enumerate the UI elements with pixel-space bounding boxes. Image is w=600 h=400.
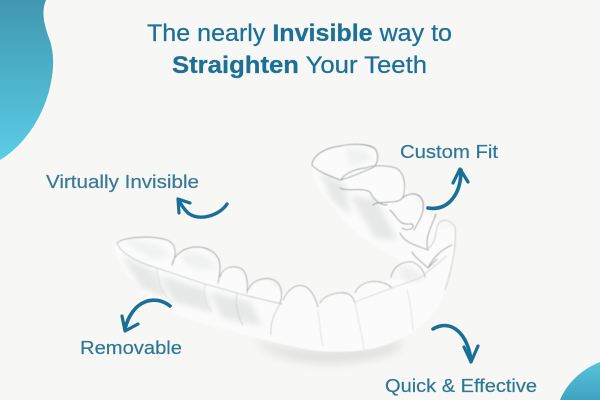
label: quick and effective: Quick & Effective — [385, 376, 537, 396]
arrow: quick and effective — [433, 326, 478, 362]
arrow: removable — [122, 300, 170, 331]
aligner tooth outlines — [117, 144, 455, 349]
title: The nearly Invisible way to — [147, 20, 452, 47]
aligner body — [115, 144, 455, 352]
label: removable: Removable — [80, 338, 182, 358]
arrow: virtually invisible — [178, 199, 227, 217]
arrow: custom fit — [428, 169, 468, 208]
aligner soft grey tones — [122, 149, 424, 325]
decorative blob: bottom right — [560, 362, 600, 400]
clear aligner illustration — [115, 144, 455, 362]
aligner shadow — [255, 340, 402, 362]
label: virtually invisible: Virtually Invisible — [46, 172, 199, 192]
label: custom fit: Custom Fit — [400, 142, 498, 162]
title — [147, 20, 452, 79]
decorative blob: top left — [0, 0, 53, 160]
title: Straighten Your Teeth — [172, 52, 427, 79]
